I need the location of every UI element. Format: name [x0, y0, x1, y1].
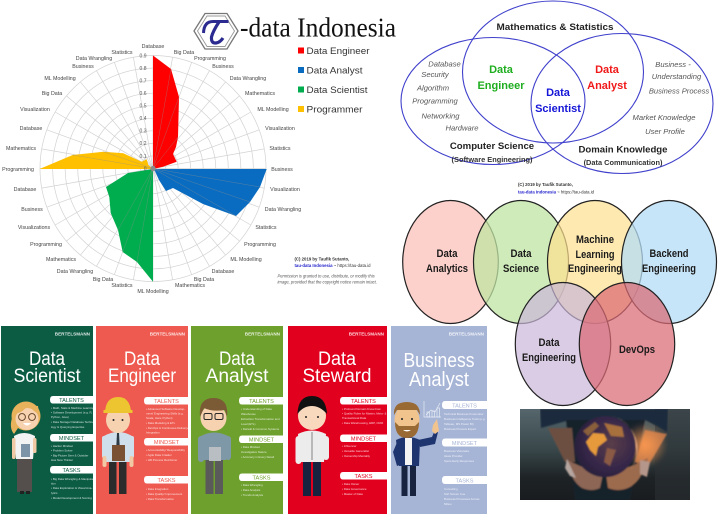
globe	[574, 416, 636, 477]
label: data engineering: Engineering	[522, 352, 576, 364]
section: mindset	[442, 438, 487, 463]
section: tasks: TASKS	[253, 476, 271, 482]
label: machine learning engineering: Engineering	[568, 263, 622, 275]
radar axis labels: Mathematics	[245, 91, 275, 97]
section: mindset: Has New Thinker	[51, 458, 73, 462]
section: talents	[442, 401, 487, 431]
photo: earth held in hands	[520, 409, 690, 500]
legend: Data Analyst	[306, 66, 363, 76]
radar axis labels: Business	[21, 207, 43, 213]
poster: Data Scientist: BERTELSMANN	[55, 332, 91, 336]
section: mindset: • Accuracy in Every Detail	[241, 455, 274, 459]
label: domain knowledge	[578, 144, 668, 167]
section: mindset: • Data Mindset	[241, 445, 260, 449]
radial axis values: 0.2	[140, 141, 147, 147]
poster: Data Analyst: Analyst	[206, 366, 269, 387]
section: mindset: MINDSET	[249, 438, 275, 444]
radar axis labels: Big Data	[174, 50, 194, 56]
radial axis values: 0.9	[140, 54, 147, 60]
computer science skills: Database	[428, 60, 461, 68]
role: data scientist	[535, 87, 581, 115]
role: data analyst: Data	[595, 64, 620, 76]
section: tasks: TASKS	[355, 474, 373, 480]
section: mindset: MINDSET	[154, 440, 180, 446]
section: talents: Integration	[146, 430, 160, 434]
section: mindset: • Big-Picture Seer & Outsider	[51, 454, 88, 458]
radial axis values: 0.6	[140, 91, 147, 97]
section: talents: • Data Storage/ Database Techno-	[51, 420, 95, 424]
role: data engineer: Data	[489, 64, 514, 76]
series spoke lines	[73, 69, 260, 262]
section: tasks	[239, 474, 283, 497]
section: tasks: • Trends Analysis	[241, 493, 264, 497]
radar axis labels: Visualizations	[18, 225, 50, 231]
role: data analyst	[587, 64, 627, 92]
radar axis labels: Database	[142, 44, 164, 50]
figure: woman with glasses	[11, 402, 40, 494]
venn copyright note	[518, 182, 595, 194]
radar chart	[2, 44, 301, 295]
poster: Business Analyst	[391, 326, 487, 514]
radar axis labels: ML Modelling	[44, 76, 76, 82]
radar axis labels: Statistics	[269, 146, 291, 152]
computer science skills: Algorithm	[416, 84, 449, 92]
radar axis labels: Statistics	[111, 283, 133, 289]
role: data analyst: Analyst	[587, 80, 627, 92]
section: mindset: MINDSET	[452, 441, 478, 447]
section: tasks: • Model Development & Scoring	[51, 496, 92, 500]
radar axis labels: ML Modelling	[230, 257, 262, 263]
section: tasks	[340, 472, 387, 496]
section: mindset: • Problem Solver	[51, 448, 73, 452]
section: mindset: Investigative Nature	[241, 450, 267, 454]
label: data engineering	[522, 337, 576, 364]
poster: Business Analyst: BERTELSMANN	[449, 332, 485, 336]
poster: Data Engineer: Engineer	[108, 366, 177, 387]
radar axis labels: Database	[14, 187, 36, 193]
brand title: -data Indonesia	[240, 12, 396, 42]
section: tasks: • Data Governance	[342, 487, 367, 491]
label: domain knowledge: Domain Knowledge	[578, 144, 668, 156]
section: talents: ment/ Engineering Skills (e.g.	[146, 412, 184, 416]
radar axis labels: Programming	[2, 167, 34, 173]
dark shirt and sleeves	[540, 409, 668, 432]
three-circle venn diagram	[401, 1, 713, 174]
computer science skills	[412, 60, 478, 132]
poster: Data Steward: BERTELSMANN	[349, 332, 385, 336]
section: talents: logy & Querying Expertise	[51, 425, 85, 429]
label: backend engineering: Engineering	[642, 263, 696, 275]
poster: Data Scientist	[1, 326, 95, 514]
section: mindset	[50, 434, 93, 462]
section: talents: Warehouse	[241, 412, 256, 416]
section: tasks: Consulting	[444, 487, 458, 491]
section: talents: Tableau, MS Power BI)	[444, 422, 474, 426]
computer science skills: Networking	[422, 112, 460, 120]
radar axis labels: Database	[212, 269, 234, 275]
section: tasks: • Data Wrangling	[241, 483, 263, 487]
radar axis labels: Mathematics	[175, 283, 205, 289]
domain knowledge skills: Market Knowledge	[633, 113, 695, 122]
circles	[403, 200, 716, 406]
radial axis values: 0.1	[140, 154, 147, 160]
section: tasks: tion	[51, 482, 56, 486]
label: devops: DevOps	[619, 344, 655, 356]
heading: mathematics and statistics: Mathematics & Statistics	[496, 22, 614, 33]
poster: Business Analyst: Business	[404, 350, 474, 372]
poster: Data Analyst: Data	[219, 349, 255, 370]
radar axis labels: Business	[271, 167, 293, 173]
section: mindset: Ideas Provider	[444, 454, 463, 458]
label: data analytics: Analytics	[426, 263, 468, 275]
figure: bearded man pointing	[393, 402, 439, 496]
domain knowledge skills: Business Process	[649, 86, 709, 96]
series: Data Engineer	[153, 56, 179, 169]
poster: Data Engineer: BERTELSMANN	[150, 332, 186, 336]
radar copyright note: image, provided that the copyright notice remain intact.	[278, 280, 377, 284]
icon: growth chart	[424, 401, 441, 417]
poster: Data Scientist: Scientist	[14, 366, 81, 387]
radial axis values	[140, 54, 147, 172]
section: talents: • Quality Rules for Master, Meta- &	[342, 412, 386, 416]
section: tasks	[442, 476, 487, 506]
radar axis labels: Data Wrangling	[230, 76, 266, 82]
role: data engineer	[477, 64, 525, 92]
radar axis labels: Business	[212, 64, 234, 70]
poster: Data Engineer: Data	[124, 349, 160, 370]
label: backend engineering	[642, 248, 696, 275]
radar axis labels: Big Data	[42, 91, 62, 97]
figure: engineer with helmet	[102, 397, 134, 494]
poster: Data Steward: Data	[318, 349, 356, 370]
section: mindset	[340, 434, 387, 458]
venn copyright note: tau-data Indonesia ~ https://tau-data.id	[518, 190, 595, 194]
section: talents: TALENTS	[59, 398, 84, 404]
legend	[298, 46, 370, 116]
radar axis labels: Programming	[30, 242, 62, 248]
computer science skills: Hardware	[446, 124, 478, 132]
role: data scientist: Data	[546, 87, 571, 99]
section: talents: TALENTS	[351, 399, 376, 405]
figure: steward in white shirt	[296, 396, 329, 496]
section: tasks: Business Processes Across	[444, 497, 480, 501]
label: domain knowledge: (Data Communication)	[584, 158, 663, 167]
section: mindset: • Agile Data Crawler	[146, 453, 172, 457]
radar axis labels: Mathematics	[6, 146, 36, 152]
role: data scientist: Scientist	[535, 103, 581, 115]
section: talents: Python, Java)	[51, 415, 69, 419]
poster: Data Engineer	[96, 326, 189, 514]
radar axis labels	[2, 44, 301, 295]
label: data science: Data	[510, 248, 532, 260]
radar copyright note: tau-data Indonesia ~ https://tau-data.id	[294, 263, 371, 268]
forearms	[548, 428, 575, 462]
poster: Data Scientist: Data	[29, 349, 65, 370]
legend: Data Scientist	[306, 85, 368, 96]
venn circles	[401, 1, 713, 174]
label: machine learning engineering: Machine	[576, 234, 614, 246]
section: talents	[239, 397, 283, 431]
section: talents: TALENTS	[452, 404, 477, 410]
section: tasks: • Data Exploration & Visual Ana-	[51, 486, 92, 490]
cupped hands	[567, 460, 603, 490]
section: mindset: MINDSET	[351, 436, 377, 442]
section: talents: • Software Development (e.g. R,	[51, 410, 93, 414]
label: data engineering: Data	[538, 337, 560, 349]
section: mindset: • HR Process Reinforcer	[146, 458, 177, 462]
radar copyright note: (C) 2019 by Taufik Sutanto,	[294, 256, 349, 262]
radar axis labels: Statistics	[255, 225, 277, 231]
section: talents: Extraction Transformation and	[241, 417, 280, 421]
section: talents: • DevOps & Continuous Delivery/	[146, 426, 189, 430]
label: data science	[503, 248, 539, 275]
section: talents: Technical Business Know-How	[444, 412, 484, 416]
section: mindset: MINDSET	[59, 436, 85, 442]
radar axis labels: Mathematics	[46, 257, 76, 263]
section: talents: Load (ETL)	[241, 422, 255, 426]
section: talents: • Math, Stats & Machine Learning	[51, 406, 94, 410]
radar axis labels: Big Data	[93, 277, 113, 283]
section: tasks: TASKS	[456, 478, 474, 484]
section: mindset: Spots Early Responses	[444, 459, 475, 463]
poster: Data Analyst	[191, 326, 283, 514]
figure: analyst with glasses	[198, 398, 231, 494]
section: talents: TALENTS	[154, 399, 179, 405]
section: mindset: • Hacker Mindset	[51, 444, 73, 448]
label: backend engineering: Backend	[650, 248, 688, 260]
section: talents	[340, 397, 387, 425]
computer science skills: Programming	[412, 96, 459, 106]
radar axis labels: Visualization	[20, 107, 50, 113]
radar axis labels: Programming	[244, 242, 276, 248]
section: mindset: • Influencer	[342, 444, 357, 448]
domain knowledge skills: Understanding	[652, 72, 702, 81]
series: Data Scientist	[106, 169, 153, 282]
section: tasks: • Master of Data	[342, 492, 363, 496]
label: data analytics: Data	[436, 248, 458, 260]
section: talents: • Data Modeling & ETL	[146, 421, 176, 425]
section: talents: TALENTS	[249, 399, 274, 405]
logo and brand title	[194, 12, 396, 49]
radar copyright note: Permission is granted to use, distribute, or modify this	[278, 274, 375, 278]
series: Programmer	[40, 152, 153, 169]
poster: Business Analyst: Analyst	[409, 369, 469, 391]
radial axis values: 0.7	[140, 78, 147, 84]
section: tasks: • Data Quality/ Improvement	[146, 492, 182, 496]
section: tasks	[50, 466, 94, 500]
section: tasks: lytics	[51, 491, 58, 495]
venn copyright note: (C) 2019 by Taufik Sutanto,	[518, 182, 573, 187]
section: talents: • Default & Common Systems	[241, 427, 280, 431]
role: data engineer: Engineer	[477, 80, 525, 92]
section: tasks	[144, 476, 188, 501]
domain knowledge skills: Business -	[655, 60, 691, 69]
section: mindset: • Versatile Generalist	[342, 449, 369, 453]
section: tasks: Soft Screen Cue	[444, 492, 466, 496]
section: talents	[50, 396, 95, 429]
label: data science: Science	[503, 263, 539, 275]
radar axis labels: Data Wrangling	[265, 207, 301, 213]
section: talents	[144, 397, 189, 434]
section: talents: • Data Warehousing, ERP, CRM	[342, 421, 384, 425]
radial axis values: 0.5	[140, 104, 147, 110]
domain knowledge skills	[633, 60, 709, 136]
section: talents: • Advanced Software Develop-	[146, 407, 185, 411]
section: tasks: • Big Data Wrangling & Manipula-	[51, 477, 94, 481]
section: tasks: • Data Transformation	[146, 497, 174, 501]
section: talents: • Profound Domain Know-how	[342, 407, 382, 411]
section: tasks: Milieu	[444, 502, 452, 506]
section: mindset: Business Visionaire	[444, 449, 470, 453]
legend: Programmer	[306, 104, 362, 116]
section: mindset: • Ownership Mentality	[342, 454, 371, 458]
radar axis labels: Visualization	[265, 126, 295, 132]
computer science skills: Security	[421, 70, 450, 79]
section: talents: Business Process Expert	[444, 427, 476, 431]
radar axis labels: ML Modelling	[257, 107, 289, 113]
section: talents: Business Intelligence Tools (e.g.	[444, 417, 485, 421]
domain knowledge skills: User Profile	[645, 127, 685, 136]
section: talents: • Understanding of Data	[241, 407, 272, 411]
section: tasks: • Data Owner	[342, 482, 359, 486]
radial axis values: 0	[144, 166, 147, 172]
radial axis values: 0.3	[140, 128, 147, 134]
radar copyright note	[278, 256, 377, 284]
section: tasks: TASKS	[63, 468, 81, 474]
radar axis labels: Data Wrangling	[76, 56, 112, 62]
section: mindset	[239, 436, 283, 459]
six-circle venn diagram	[403, 200, 716, 406]
label: machine learning engineering: Learning	[576, 249, 614, 261]
section: tasks: TASKS	[158, 478, 176, 484]
poster: Data Analyst: BERTELSMANN	[245, 332, 281, 336]
radar axis labels: ML Modelling	[137, 289, 169, 295]
radar axis labels: Statistics	[111, 50, 133, 56]
label: data analytics	[426, 248, 468, 275]
radar axis labels: Big Data	[194, 277, 214, 283]
section: mindset	[144, 438, 188, 462]
radar axis labels: Visualization	[270, 187, 300, 193]
poster: Data Steward: Steward	[302, 366, 372, 387]
radar axis labels: Programming	[194, 56, 226, 62]
section: tasks: • Data Analysis	[241, 488, 261, 492]
radar axis labels: Database	[20, 126, 42, 132]
radar axis labels: Data Wrangling	[57, 269, 93, 275]
legend: Data Engineer	[306, 46, 370, 57]
section: mindset: • Accountability/ Responsibility	[146, 448, 185, 452]
radial axis values: 0.4	[140, 116, 147, 122]
label: computer science: (Software Engineering)	[452, 155, 533, 164]
section: talents: Scala, Java, Python)	[146, 416, 173, 420]
section: talents: Transactional Data	[342, 416, 367, 420]
label: computer science: Computer Science	[450, 141, 534, 152]
label: computer science	[450, 141, 534, 164]
series: Data Analyst	[153, 169, 267, 216]
radar axis labels: Business	[72, 64, 94, 70]
icon: tau hexagon	[194, 14, 238, 49]
section: tasks: • Data Integration	[146, 487, 169, 491]
poster: Data Steward	[288, 326, 387, 514]
radial axis values: 0.8	[140, 66, 147, 72]
label: machine learning engineering	[568, 234, 622, 275]
